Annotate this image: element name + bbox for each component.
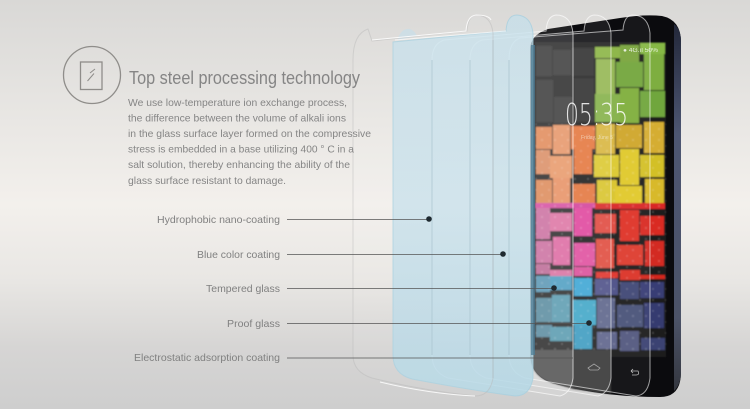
label: tempered glass: Tempered glass xyxy=(206,283,280,295)
label: tempered glass xyxy=(206,283,557,295)
glass layer: hydrophobic nano-coating xyxy=(353,15,493,396)
green wallpaper blocks xyxy=(595,43,665,123)
label: proof glass xyxy=(227,318,592,330)
label: blue color coating: Blue color coating xyxy=(197,249,280,261)
label: proof glass: Proof glass xyxy=(227,318,280,330)
label: blue color coating xyxy=(197,249,506,261)
back button icon xyxy=(631,369,639,375)
phone screen xyxy=(531,42,666,394)
label: hydrophobic nano-coating xyxy=(157,214,432,226)
glass layer: proof glass xyxy=(470,15,611,396)
dark wallpaper blocks xyxy=(536,46,594,123)
title: Top steel processing technology xyxy=(129,68,360,88)
glass layer: electrostatic adsorption coating xyxy=(509,15,650,396)
icon: glass pane in circle xyxy=(64,46,120,104)
glass layer: blue color coating xyxy=(393,15,535,396)
phone status bar: ● 4G.ıl 50% xyxy=(623,48,659,54)
home button icon xyxy=(588,364,600,370)
phone side band xyxy=(674,24,681,391)
pink wallpaper blocks xyxy=(535,203,595,276)
phone clock: 05:35 xyxy=(565,98,628,133)
label: hydrophobic nano-coating: Hydrophobic nano-coating xyxy=(157,214,280,226)
lower bezel tint xyxy=(531,350,573,389)
phone body xyxy=(530,15,681,397)
orange wallpaper blocks xyxy=(536,125,595,203)
navy wallpaper blocks xyxy=(595,279,665,351)
blue wallpaper blocks xyxy=(536,276,596,349)
phone xyxy=(530,15,681,397)
description text: in the glass surface layer formed on the compressive xyxy=(128,128,371,140)
label: electrostatic adsorption coating: Electrostatic adsorption coating xyxy=(134,352,280,364)
yellow wallpaper blocks xyxy=(594,122,664,203)
glass layer: tempered glass xyxy=(432,15,573,396)
description text: the difference between the volume of alkali ions xyxy=(128,112,346,124)
red wallpaper blocks xyxy=(595,203,665,280)
description text: salt solution, thereby enhancing the ability of the xyxy=(128,159,350,171)
description text xyxy=(128,97,371,187)
description text: glass surface resistant to damage. xyxy=(128,175,286,187)
description text: We use low-temperature ion exchange process, xyxy=(128,97,347,109)
phone date: Friday, June 5 xyxy=(581,135,613,141)
description text: stress is embedded in a base utilizing 400 ° C in a xyxy=(128,144,354,156)
